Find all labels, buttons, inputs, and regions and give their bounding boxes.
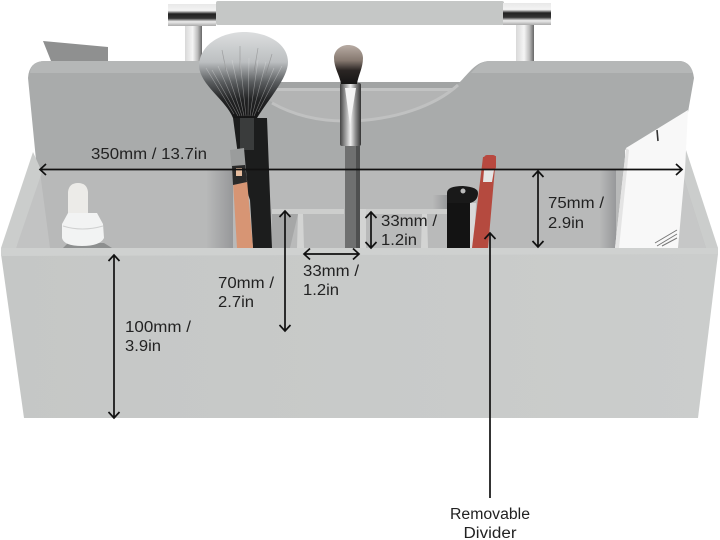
label: 33mm compartment width [303,263,360,299]
icon: red lip pencil [472,155,496,248]
arrow: 33mm compartment width [304,248,359,260]
label: 33mm compartment height: 1.2in [381,232,417,249]
handle [168,1,551,70]
label: removable divider [450,506,530,540]
label: 70mm height: 2.7in [218,294,254,311]
icon: large makeup brush [199,32,288,248]
arrow: 70mm height [280,211,290,331]
label: 100mm height: 100mm / [125,319,192,336]
label: 33mm compartment width: 33mm / [303,263,360,280]
panel: front face of organizer [1,248,718,418]
arrow: 350mm width [40,164,682,175]
label: 33mm compartment width: 1.2in [303,282,339,299]
arrow: 100mm height [108,255,120,418]
icon: white cream tube [615,110,688,248]
arrow: 75mm depth [532,171,544,247]
panel: back wall with handle cutout [28,61,694,172]
label: 70mm height: 70mm / [218,275,275,292]
arrow: 33mm compartment height [366,212,376,248]
icon: concealer pencil [230,148,253,248]
label: 100mm height [125,319,192,355]
icon: grey tag behind organizer [43,41,108,61]
label: 75mm depth [548,195,605,232]
label: 75mm depth: 2.9in [548,215,584,232]
label: removable divider: Removable [450,506,530,523]
label: 70mm height [218,275,275,311]
label: 100mm height: 3.9in [125,338,161,355]
label: 350mm width: 350mm / 13.7in [91,146,207,163]
label: 33mm compartment height: 33mm / [381,213,438,230]
icon: mascara tube [447,186,478,248]
label: 33mm compartment height [381,213,438,249]
dividers [272,209,448,248]
icon: dropper bottle [62,183,112,248]
arrow: removable divider pointer [484,233,496,498]
panel: organizer interior [1,150,718,248]
label: 75mm depth: 75mm / [548,195,605,212]
icon: small makeup brush [334,45,363,248]
